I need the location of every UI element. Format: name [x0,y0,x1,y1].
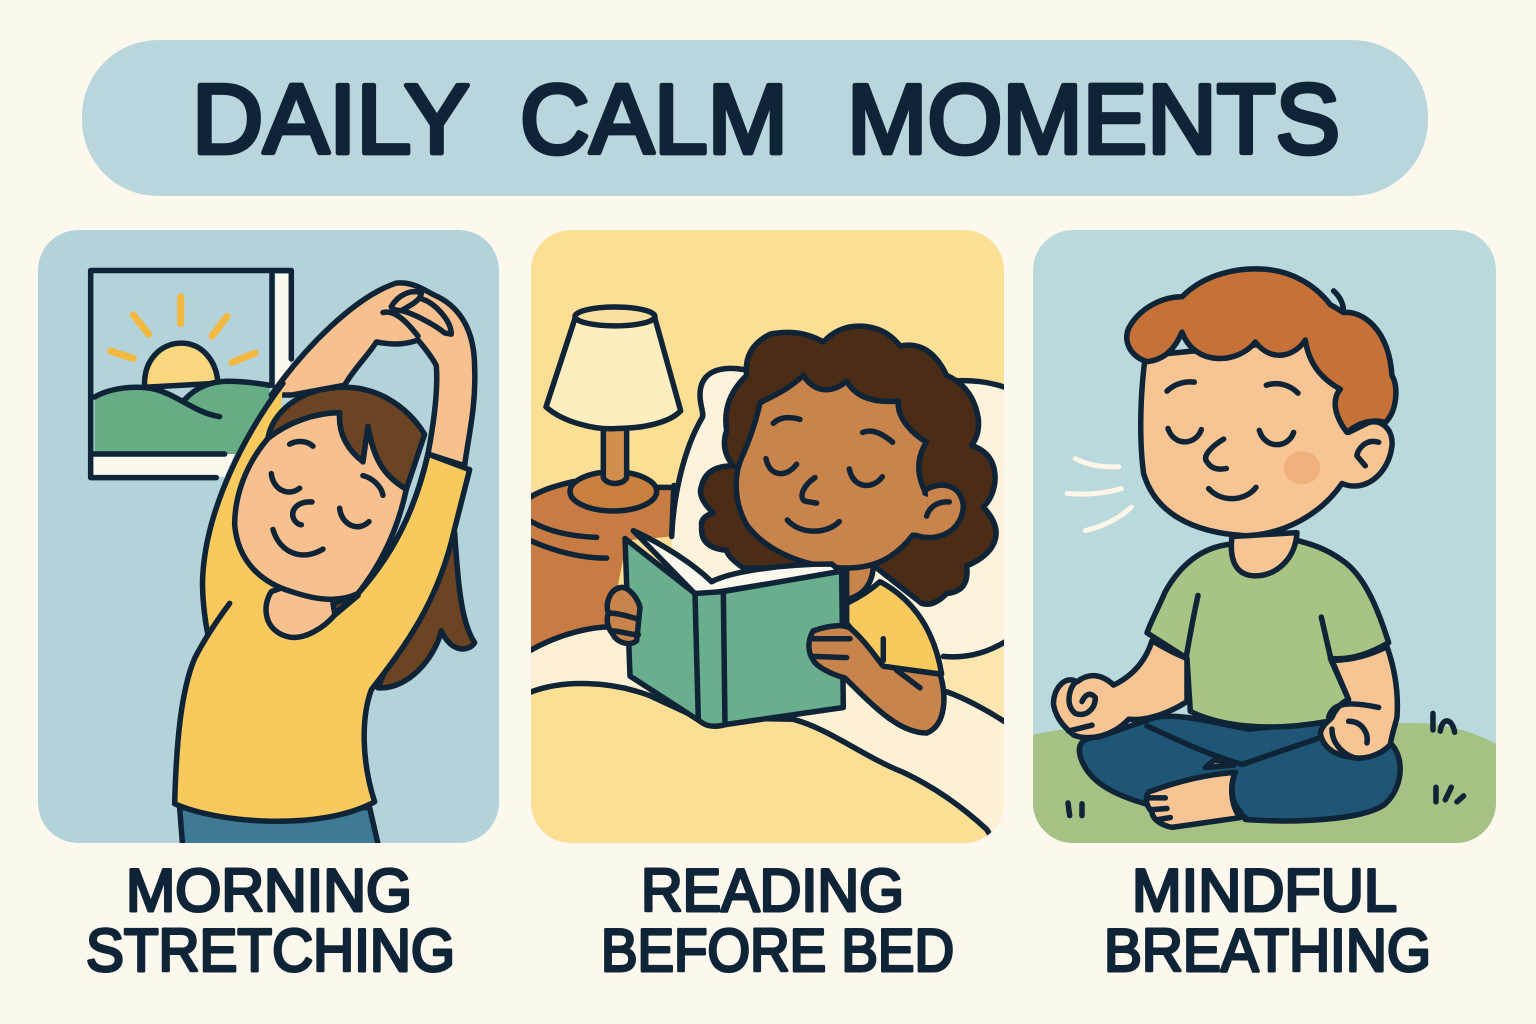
pillow [672,368,1010,662]
hair behind [378,533,475,688]
facial features [1167,291,1379,499]
title: DAILY [192,64,468,174]
shirt [1147,540,1389,727]
breath lines [1067,459,1131,531]
book [625,531,843,726]
label: reading before bed: READING [641,857,904,924]
label: morning stretching: MORNING [126,857,412,924]
sleeve edge over face [358,454,428,594]
facial features [271,441,383,555]
cheek [1284,451,1320,484]
left arm and hand [1054,641,1187,738]
neck [1231,533,1297,576]
ear [913,485,963,538]
grass [1032,723,1498,847]
panel: reading before bed [527,230,1010,867]
face and ear [1141,340,1392,536]
hair top [268,387,425,489]
neck [847,564,873,599]
right hand and arm [809,626,944,733]
label: mindful breathing: BREATHING [1104,917,1431,984]
grass tufts [1068,713,1464,816]
left hand [607,587,640,644]
title: CALM [520,64,788,174]
nightstand [530,482,675,651]
right arm and hand [1320,647,1397,759]
jeans [176,806,381,843]
title banner [82,40,1428,196]
blanket [531,680,992,843]
title: MOMENTS [847,64,1340,174]
label: mindful breathing: MINDFUL [1132,857,1397,924]
bed sheet [531,624,1004,832]
label: reading before bed [601,857,954,984]
icon: bedside lamp [546,307,681,511]
face [235,413,406,599]
neck [266,580,358,637]
feet [1146,761,1245,827]
shirt [175,383,470,821]
label: mindful breathing [1104,857,1431,984]
raised arms [271,283,475,466]
panel: mindful breathing [1032,230,1498,847]
hands [383,292,451,336]
label: morning stretching [86,857,455,984]
facial features [766,418,949,531]
icon: window with sunrise [91,270,291,478]
trousers [1079,716,1400,821]
panel: morning stretching [38,230,499,851]
hair [1127,269,1396,432]
label: morning stretching: STRETCHING [86,917,455,984]
face [736,375,927,568]
label: reading before bed: BEFORE BED [601,917,954,984]
shirt [847,582,942,674]
hair [700,326,996,604]
